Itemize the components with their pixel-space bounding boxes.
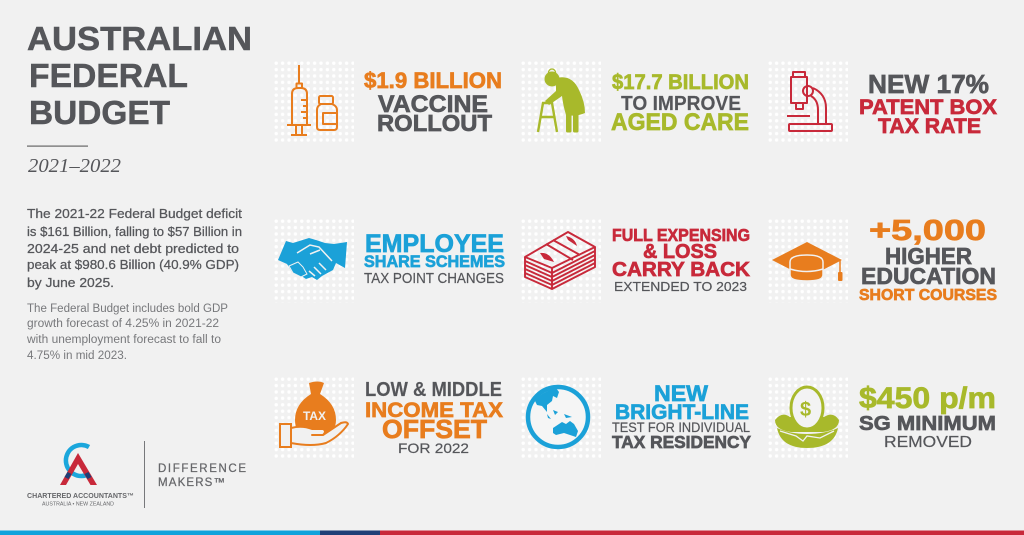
icon: nest egg bbox=[767, 376, 848, 459]
icon: handshake bbox=[273, 218, 354, 303]
panel: aged care bbox=[520, 60, 749, 144]
text: $450 p/m SG minimum removed: $450 p/m bbox=[859, 382, 996, 415]
logo: Chartered Accountants: CHARTERED ACCOUNTANTS™ bbox=[27, 493, 134, 500]
icon: elderly woman with walker bbox=[520, 60, 601, 144]
text: employee share schemes: EMPLOYEE bbox=[365, 230, 504, 258]
logo: Difference Makers bbox=[158, 463, 246, 489]
text: +5,000 higher education short courses: HIGHER bbox=[885, 243, 972, 269]
panel: vaccine rollout bbox=[273, 60, 502, 144]
text: $1.9 billion vaccine rollout: $1.9 BILLION bbox=[364, 68, 502, 93]
text block: growth forecast: with unemployment forecast to fall to bbox=[26, 334, 221, 346]
text: employee share schemes: TAX POINT CHANGES bbox=[364, 271, 504, 287]
text: $1.9 billion vaccine rollout: VACCINE bbox=[378, 91, 488, 118]
text: $450 p/m SG minimum removed: REMOVED bbox=[884, 434, 972, 451]
text block: deficit summary: by June 2025. bbox=[27, 275, 114, 290]
panel: bright-line test bbox=[520, 376, 751, 459]
text block: deficit summary bbox=[27, 206, 242, 290]
text: $450 p/m SG minimum removed bbox=[859, 382, 996, 451]
panel: SG minimum bbox=[767, 376, 996, 459]
text: $17.7 billion aged care: AGED CARE bbox=[611, 109, 749, 136]
footer colour bar bbox=[0, 530, 1024, 535]
text: low and middle income tax offset bbox=[365, 379, 504, 456]
text: low and middle income tax offset: LOW & MIDDLE bbox=[365, 379, 502, 401]
text: $450 p/m SG minimum removed: SG MINIMUM bbox=[859, 412, 996, 435]
text: +5,000 higher education short courses: EDUCATION bbox=[861, 263, 996, 289]
text: $17.7 billion aged care: TO IMPROVE bbox=[621, 93, 741, 115]
text: low and middle income tax offset: INCOME TAX bbox=[365, 398, 504, 422]
text: $1.9 billion vaccine rollout bbox=[364, 68, 502, 136]
text block: growth forecast: growth forecast of 4.25% in 2021-22 bbox=[27, 318, 219, 330]
text: low and middle income tax offset: FOR 2022 bbox=[398, 440, 469, 456]
icon: globe bbox=[520, 376, 601, 459]
panel: patent box bbox=[767, 60, 998, 144]
text: $17.7 billion aged care: $17.7 BILLION bbox=[612, 71, 749, 94]
text: +5,000 higher education short courses bbox=[859, 215, 997, 304]
title bbox=[27, 20, 252, 131]
text block: growth forecast bbox=[26, 303, 228, 362]
panel: higher education bbox=[767, 215, 997, 304]
text: low and middle income tax offset: OFFSET bbox=[382, 416, 487, 444]
text: new bright-line test bbox=[612, 381, 751, 452]
text: employee share schemes: SHARE SCHEMES bbox=[364, 253, 505, 271]
year heading: 2021–2022 bbox=[28, 155, 121, 177]
icon: money bag in hand bbox=[273, 376, 354, 459]
title: FEDERAL bbox=[29, 57, 188, 94]
text: +5,000 higher education short courses: SHORT COURSES bbox=[859, 287, 997, 304]
text: full expensing and loss carry back: CARRY BACK bbox=[612, 258, 750, 281]
panel: intro sidebar bbox=[26, 20, 252, 508]
panel: income tax offset bbox=[273, 376, 504, 459]
panel: full expensing bbox=[520, 218, 750, 303]
text: $17.7 billion aged care bbox=[611, 71, 749, 136]
icon: stack of money bbox=[520, 218, 601, 303]
text: full expensing and loss carry back: EXTENDED TO 2023 bbox=[614, 279, 747, 294]
logo: Difference Makers: DIFFERENCE bbox=[158, 463, 246, 475]
text: new 17% patent box tax rate bbox=[859, 69, 998, 138]
logo: Difference Makers: MAKERS™ bbox=[158, 477, 225, 489]
text block: deficit summary: 2024-25 and net debt predicted to bbox=[27, 241, 239, 256]
text block: growth forecast: The Federal Budget includes bold GDP bbox=[27, 303, 228, 315]
text block: deficit summary: peak at $980.6 Billion (40.9% GDP) bbox=[27, 257, 239, 272]
text: full expensing and loss carry back: & LOSS bbox=[643, 240, 717, 263]
panel: employee share schemes bbox=[273, 218, 505, 303]
icon: syringe and vial bbox=[273, 60, 354, 144]
text: full expensing and loss carry back: FULL EXPENSING bbox=[612, 225, 750, 245]
text block: growth forecast: 4.75% in mid 2023. bbox=[27, 350, 127, 362]
text: new 17% patent box tax rate: PATENT BOX bbox=[859, 95, 998, 119]
icon: nest egg: $ bbox=[800, 399, 811, 421]
icon: microscope bbox=[767, 60, 848, 144]
icon: money bag in hand: TAX bbox=[303, 411, 326, 423]
logo: Chartered Accountants bbox=[27, 445, 134, 508]
text: new bright-line test: NEW bbox=[654, 381, 708, 406]
text: new 17% patent box tax rate: NEW 17% bbox=[868, 69, 989, 99]
title: AUSTRALIAN bbox=[27, 20, 252, 57]
text block: deficit summary: is $161 Billion, falling to $57 Billion in bbox=[27, 224, 242, 239]
text: new bright-line test: TAX RESIDENCY bbox=[612, 432, 751, 452]
text: employee share schemes bbox=[364, 230, 505, 287]
text: full expensing and loss carry back bbox=[612, 225, 750, 294]
text: new bright-line test: BRIGHT-LINE bbox=[615, 400, 749, 424]
icon: graduation cap bbox=[767, 218, 848, 303]
text: new 17% patent box tax rate: TAX RATE bbox=[878, 114, 981, 138]
text: new bright-line test: TEST FOR INDIVIDUAL bbox=[612, 420, 750, 435]
text: +5,000 higher education short courses: +5,000 bbox=[869, 215, 986, 247]
text: $1.9 billion vaccine rollout: ROLLOUT bbox=[377, 110, 492, 136]
title: BUDGET bbox=[29, 94, 170, 131]
year heading bbox=[27, 146, 121, 177]
logo: Chartered Accountants: AUSTRALIA • NEW ZEALAND bbox=[42, 502, 114, 508]
text block: deficit summary: The 2021-22 Federal Budget deficit bbox=[27, 206, 242, 221]
